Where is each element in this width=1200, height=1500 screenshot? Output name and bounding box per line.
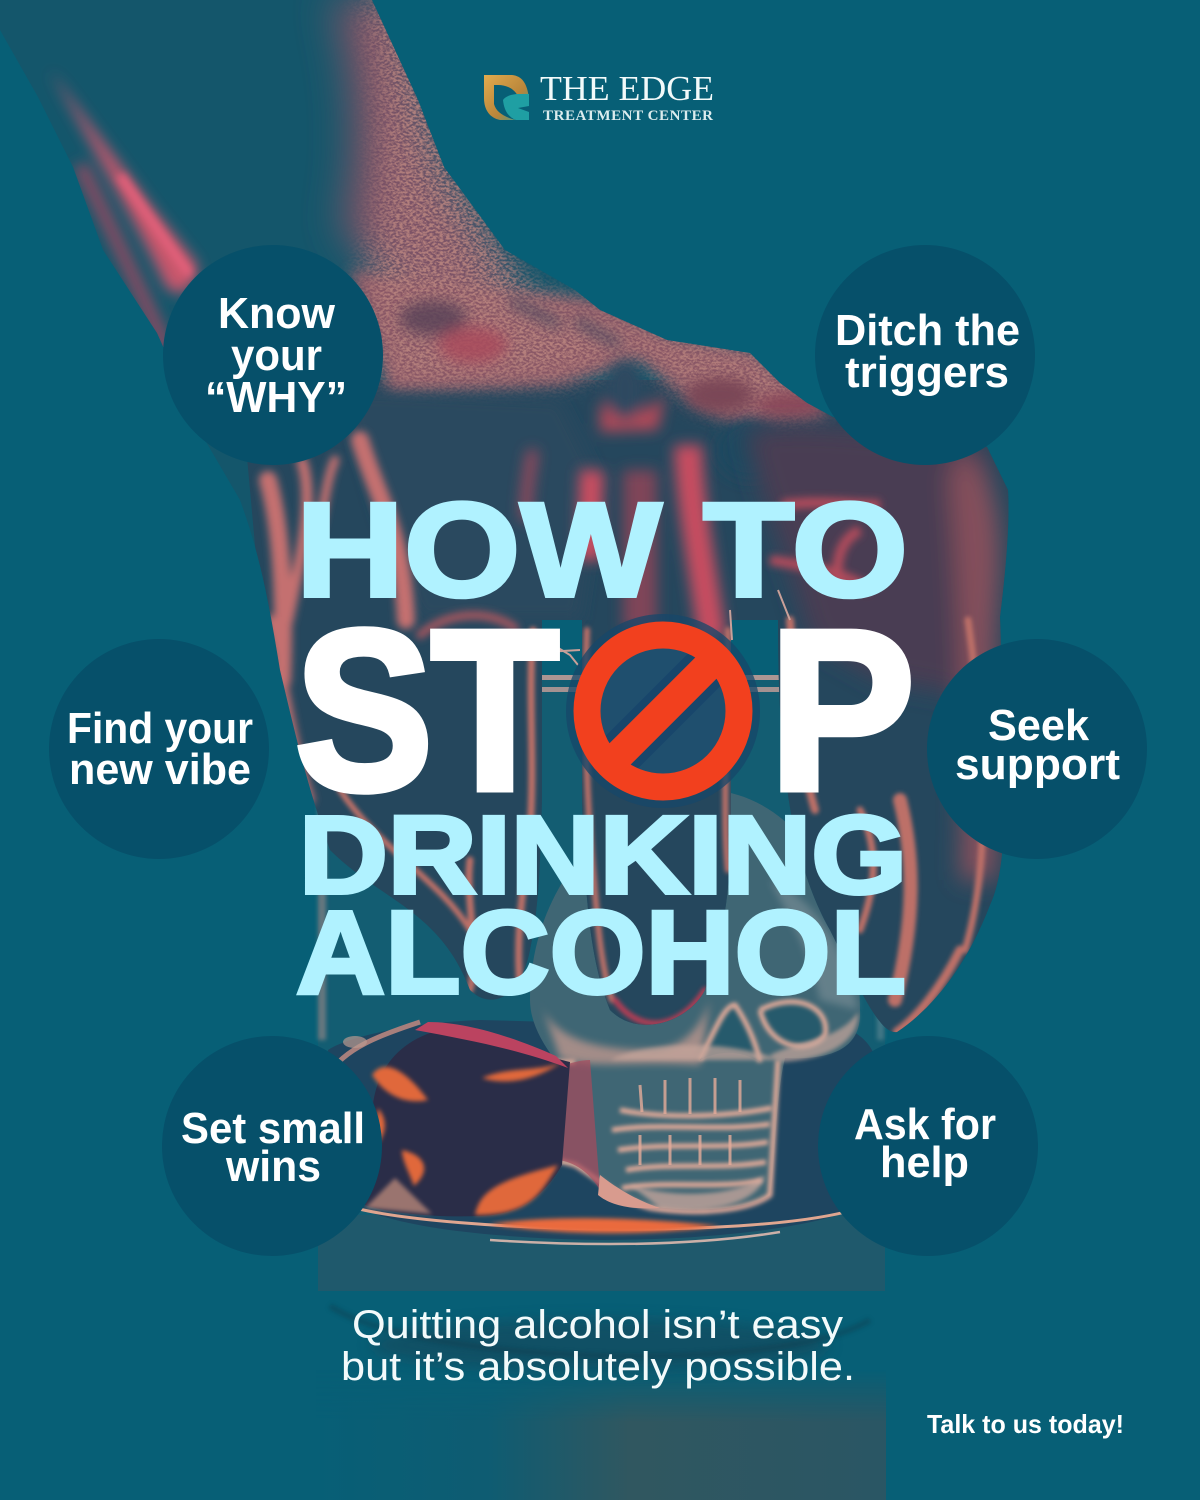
- logo tagline: TREATMENT CENTER: [543, 108, 713, 124]
- glass rim: [330, 675, 875, 692]
- knuckle dents and red patches: [380, 291, 824, 472]
- tip circle: know your why: Know: [218, 289, 336, 338]
- closing message: but it’s absolutely possible.: [341, 1345, 855, 1389]
- tip circle: find your new vibe: new vibe: [69, 745, 251, 794]
- tip circle: know your why: [163, 245, 383, 465]
- lower finger highlights: [340, 620, 983, 1032]
- tip circle: ask for help: [818, 1036, 1038, 1256]
- glass reflection: [316, 1306, 886, 1500]
- logo wordmark: THE EDGE: [540, 69, 714, 108]
- bright pink streak: [120, 175, 190, 275]
- tip circle: set small wins: wins: [225, 1142, 321, 1191]
- tip circle: seek support: [927, 639, 1147, 859]
- glass of whisky with skull ice: [316, 675, 886, 1500]
- loose tendon lines: [545, 590, 790, 665]
- logo mark: [484, 75, 529, 120]
- tip circle: ditch the triggers: [815, 245, 1035, 465]
- arm and hand grain: [365, 0, 830, 417]
- tip circle: seek support: Seek: [988, 701, 1090, 750]
- pale glass skull: [530, 790, 860, 1212]
- tip circle: know your why: your: [231, 331, 322, 380]
- tip circle: set small wins: Set small: [181, 1104, 365, 1153]
- right fingers maroon: [745, 426, 1000, 880]
- left finger tendons: [268, 440, 515, 800]
- liquid base highlights: [328, 1022, 860, 1244]
- tip circle: know your why: “WHY”: [205, 373, 347, 422]
- logo: [484, 69, 714, 124]
- title line: drinking: DRINKING: [299, 794, 907, 917]
- closing message: [341, 1303, 855, 1389]
- tip circle: ask for help: help: [880, 1138, 969, 1187]
- dark skull: [365, 1022, 570, 1216]
- title: [295, 476, 915, 1019]
- whisky liquid: [328, 1020, 884, 1240]
- title letter: p: P: [769, 584, 915, 838]
- title letter: t: T: [431, 584, 559, 838]
- tip circle: ask for help: Ask for: [854, 1100, 996, 1149]
- closing message: Quitting alcohol isn’t easy: [352, 1303, 843, 1347]
- tip circle: seek support: support: [955, 740, 1120, 789]
- title line: how to: HOW TO: [296, 476, 908, 625]
- tip circle: ditch the triggers: triggers: [845, 348, 1009, 397]
- lower hand dark tone: [240, 380, 1010, 1040]
- arm salmon edge, soft underlay: [330, 0, 520, 330]
- arm base tone: [0, 0, 882, 1025]
- tip circle: set small wins: [162, 1036, 382, 1256]
- hand and arm: [0, 0, 1008, 1032]
- tip circle: find your new vibe: Find your: [67, 704, 253, 753]
- title letter: s: S: [295, 584, 433, 838]
- call to action: Talk to us today!: [927, 1409, 1124, 1439]
- arm pink band: [50, 70, 198, 380]
- right knuckle streaks: [770, 503, 880, 590]
- glass body: [318, 680, 885, 1291]
- tip circle: find your new vibe: [49, 639, 269, 859]
- icon: prohibition sign: [566, 614, 760, 808]
- title line: alcohol: ALCOHOL: [296, 887, 906, 1019]
- finger knuckle reds: [526, 445, 712, 640]
- back of hand, soft underlay: [350, 270, 830, 420]
- tip circle: ditch the triggers: Ditch the: [835, 306, 1020, 355]
